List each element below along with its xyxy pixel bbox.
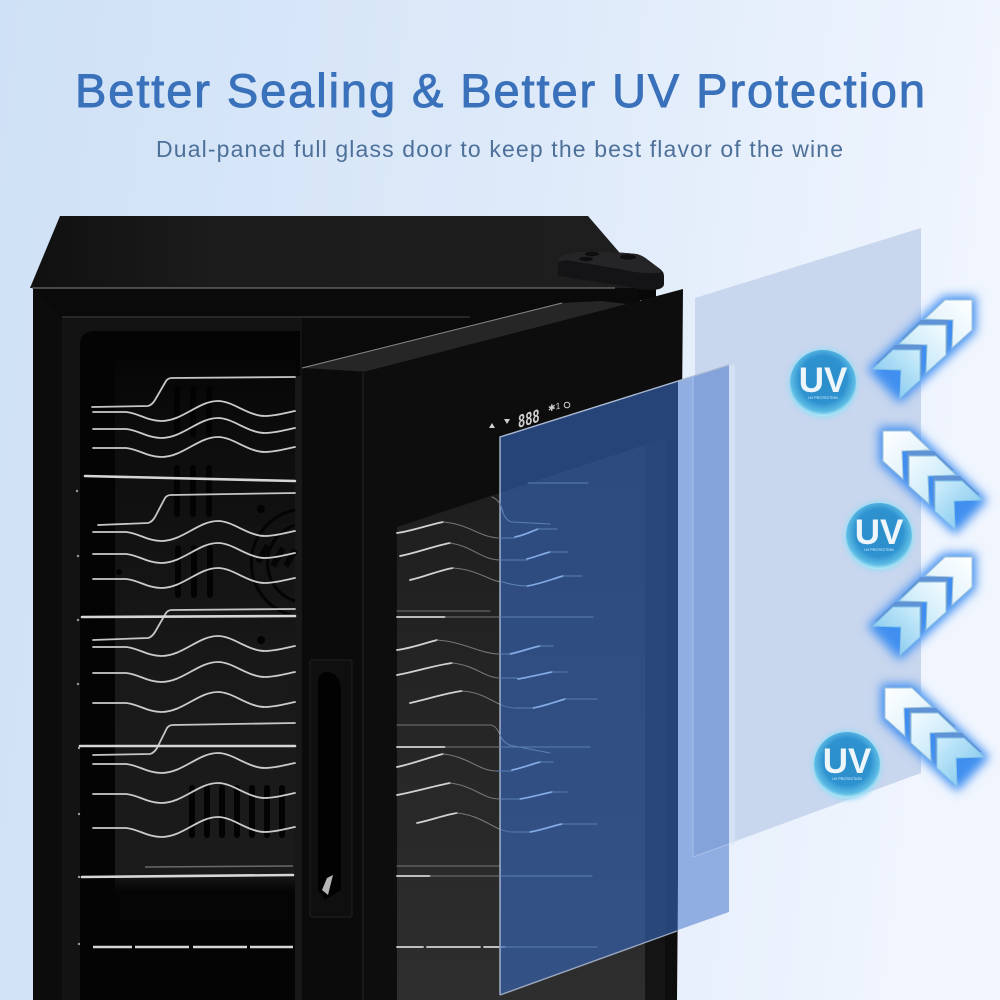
glass reflected wires <box>397 497 555 947</box>
UV protection badge 3: UV PROTECTION <box>832 777 862 781</box>
door front face <box>363 289 683 1000</box>
back pane: translucent glass layer <box>695 228 921 856</box>
UV protection badge 2: UV PROTECTION <box>864 548 894 552</box>
arrow: UV rays incoming lower <box>885 688 984 786</box>
wine cooler cabinet <box>30 216 650 1000</box>
ventilation slots <box>174 385 285 838</box>
wires seen through the blue pane <box>497 483 597 947</box>
arrow: UV rays deflected lower <box>873 557 972 655</box>
UV protection badge 3: UV <box>823 742 872 781</box>
cabinet front frame <box>33 288 640 1000</box>
cabinet top surface <box>30 216 650 288</box>
arrow: UV rays incoming <box>883 431 982 529</box>
arrow: UV rays deflected <box>873 300 972 398</box>
UV protection badge 2: UV <box>855 513 904 552</box>
front pane: translucent blue glass layer <box>497 365 735 995</box>
door touch control panel: 888 <box>518 406 540 434</box>
door top edge <box>302 301 627 372</box>
cabinet interior <box>62 318 303 1000</box>
door touch control panel <box>489 400 570 434</box>
UV protection badge 2 <box>844 501 914 571</box>
wine rack wires <box>80 377 295 947</box>
UV protection badge 1: UV PROTECTION <box>808 396 838 400</box>
door glass <box>397 445 645 1000</box>
shelf pegs <box>76 490 80 945</box>
door handle <box>310 660 352 917</box>
open glass door <box>302 289 683 1000</box>
UV protection badge 1: UV <box>799 361 848 400</box>
door touch control panel: ✱1 <box>548 400 561 414</box>
UV protection badge 1 <box>788 348 858 418</box>
door side edge <box>302 368 363 1000</box>
subtitle: Dual-paned full glass door to keep the best flavor of the wine <box>156 136 843 162</box>
fan <box>251 510 295 616</box>
UV protection badge 3 <box>812 730 882 800</box>
screws <box>116 505 265 644</box>
door hinge with top control <box>558 252 664 300</box>
title: Better Sealing & Better UV Protection <box>75 64 925 117</box>
